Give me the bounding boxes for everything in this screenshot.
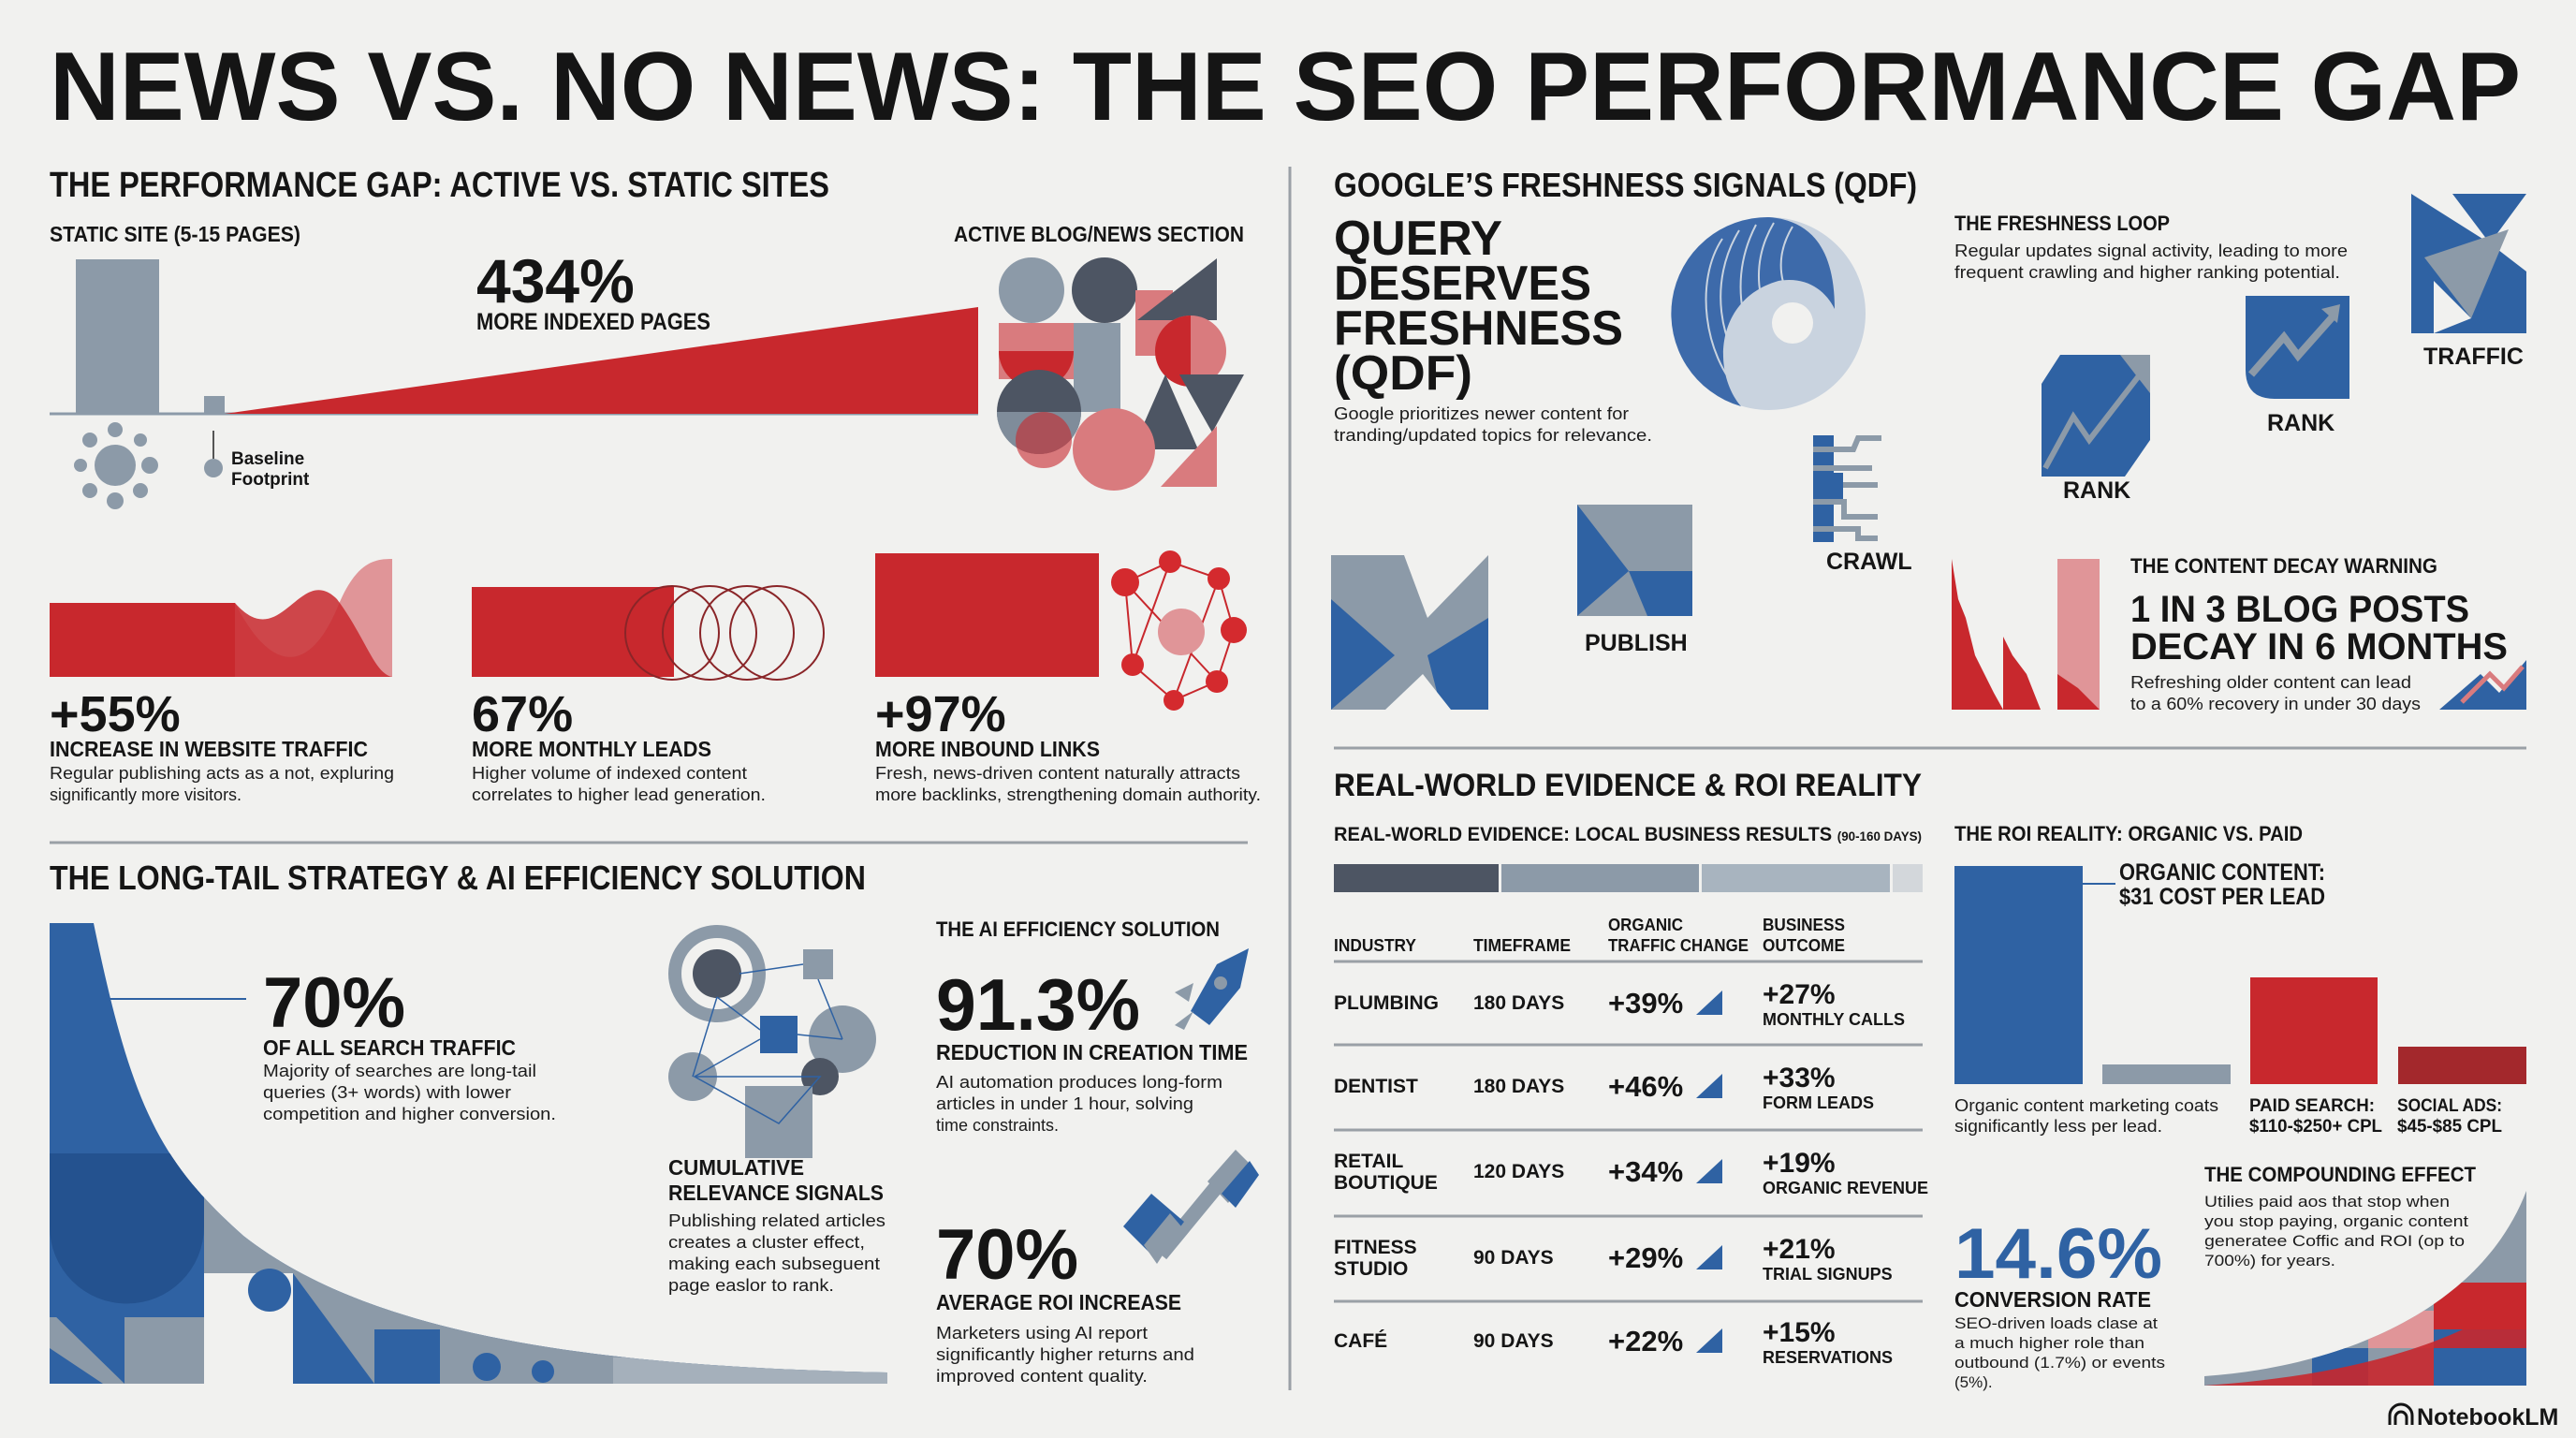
icon: relevance network (668, 932, 876, 1158)
stat: 70% ROI (936, 1215, 1194, 1386)
stat: +55% traffic: INCREASE IN WEBSITE TRAFFIC (50, 737, 368, 761)
panel: ROI reality: $45-$85 CPL (2397, 1117, 2502, 1137)
text: QDF: DESERVES (1334, 257, 1591, 311)
text: compounding effect: generatee Coffic and ROI (op to (2204, 1232, 2465, 1250)
stat: 70% search traffic (263, 963, 556, 1123)
text: freshness loop: Regular updates signal activity, leading to more (1954, 242, 2348, 260)
table: local results: DENTIST (1334, 1076, 1418, 1097)
stat: +97% links: Fresh, news-driven content naturally attracts (875, 764, 1240, 783)
heading: long-tail: THE LONG-TAIL STRATEGY & AI EFFICIENCY SOLUTION (50, 858, 866, 897)
stat: 14.6% conversion: a much higher role than (1954, 1334, 2144, 1352)
table: local results: OUTCOME (1763, 936, 1845, 955)
icon: dumbbell (1123, 1150, 1259, 1264)
chart: compounding curve (2204, 1189, 2527, 1386)
stat: 434%: 434% (476, 246, 635, 315)
stat: 14.6% conversion: CONVERSION RATE (1954, 1287, 2151, 1312)
table: local results (1334, 916, 1928, 1367)
text: content decay: Refreshing older content can lead (2130, 673, 2411, 692)
table: local results: INDUSTRY (1334, 936, 1416, 955)
table: local results: BOUTIQUE (1334, 1172, 1438, 1194)
icon: recovery arrow (2439, 660, 2526, 710)
text: QDF: QUERY (1334, 212, 1502, 266)
table: local results: 180 DAYS (1473, 1076, 1564, 1097)
icon: K shape (1331, 555, 1488, 710)
text: QDF: FRESHNESS (1334, 301, 1623, 356)
panel: ROI reality (1954, 822, 2558, 1431)
icon: rank upper (2246, 296, 2349, 399)
stat: 67% leads: Higher volume of indexed content (472, 764, 747, 783)
text: content decay: DECAY IN 6 MONTHS (2130, 626, 2508, 668)
text: freshness loop: THE FRESHNESS LOOP (1954, 212, 2170, 235)
stat: +55% traffic (50, 559, 394, 804)
stat: 70% ROI: AVERAGE ROI INCREASE (936, 1290, 1181, 1314)
title: NEWS VS. NO NEWS: THE SEO PERFORMANCE GAP (50, 33, 2521, 141)
text: cumulative relevance: RELEVANCE SIGNALS (668, 1181, 884, 1205)
chart: content decay (1952, 559, 2100, 710)
table: local results: +33% (1763, 1063, 1836, 1093)
stat: +55% traffic: +55% (50, 686, 181, 742)
stat: +55% traffic: Regular publishing acts as a not, expluring (50, 764, 394, 783)
table: local results: STUDIO (1334, 1258, 1408, 1280)
text: compounding effect: 700%) for years. (2204, 1252, 2335, 1269)
table: local results: TIMEFRAME (1473, 936, 1571, 955)
stat: +97% links: more backlinks, strengthening domain authority. (875, 785, 1261, 804)
stat: 70% ROI: significantly higher returns and (936, 1345, 1194, 1364)
label: baseline footprint: Footprint (231, 470, 310, 490)
icon: lead circles (472, 586, 824, 680)
stat: 70% search traffic: competition and higher conversion. (263, 1105, 556, 1123)
panel: long-tail strategy (50, 858, 1259, 1391)
text: cumulative relevance: making each subseguent (668, 1255, 880, 1273)
chart: cost per lead (1954, 866, 2526, 1084)
panel: freshness signals (1331, 166, 2526, 713)
label: rank lower: RANK (2063, 477, 2130, 504)
text: compounding effect: you stop paying, organic content (2204, 1212, 2468, 1230)
label: paid search: PAID SEARCH: (2249, 1096, 2375, 1116)
table: local results: RESERVATIONS (1763, 1348, 1893, 1367)
bar: color legend (1334, 864, 1923, 892)
icon: link network (875, 550, 1247, 711)
icon: swirl (1671, 217, 1866, 410)
stat: 67% leads: correlates to higher lead generation. (472, 785, 766, 804)
stat: 14.6% conversion: outbound (1.7%) or events (1954, 1354, 2165, 1372)
text: content decay: to a 60% recovery in under 30 days (2130, 695, 2421, 713)
panel: performance gap (50, 166, 1244, 509)
icon: shape collage (997, 257, 1244, 491)
table: local results: +27% (1763, 979, 1836, 1010)
icon: publish (1577, 505, 1692, 616)
panel: performance gap: MORE INDEXED PAGES (476, 309, 710, 335)
stat: 70% ROI: Marketers using AI report (936, 1324, 1148, 1343)
table: local results: BUSINESS (1763, 916, 1845, 934)
heading: evidence: REAL-WORLD EVIDENCE & ROI REALITY (1334, 768, 1922, 803)
icon: traffic (2411, 194, 2526, 333)
heading: ROI: THE ROI REALITY: ORGANIC VS. PAID (1954, 822, 2303, 845)
text: freshness loop (1954, 212, 2348, 282)
text: compounding effect: Utilies paid aos that stop when (2204, 1193, 2450, 1211)
logo: NotebookLM: NotebookLM (2417, 1404, 2558, 1431)
text: compounding effect (2204, 1163, 2477, 1269)
table: local results: ORGANIC REVENUE (1763, 1179, 1928, 1197)
stat: 91.3%: REDUCTION IN CREATION TIME (936, 1040, 1248, 1064)
icon: rocket (1175, 948, 1249, 1030)
text: QDF: tranding/updated topics for relevance. (1334, 426, 1652, 445)
stat: +97% links (875, 550, 1261, 804)
table: local results: CAFÉ (1334, 1330, 1387, 1352)
icon: rank lower (2042, 355, 2150, 477)
chart: long tail curve (50, 923, 894, 1391)
table: local results: 120 DAYS (1473, 1161, 1564, 1182)
stat: 91.3%: 91.3% (936, 963, 1140, 1046)
table: local results: 90 DAYS (1473, 1247, 1554, 1269)
label: active blog: ACTIVE BLOG/NEWS SECTION (954, 222, 1244, 246)
table: local results: +22% (1608, 1325, 1683, 1357)
table: local results: MONTHLY CALLS (1763, 1010, 1905, 1029)
stat: 70% ROI: improved content quality. (936, 1367, 1148, 1386)
label: social ads: SOCIAL ADS: (2397, 1096, 2502, 1116)
subheading: local business: REAL-WORLD EVIDENCE: LOCAL BUSINESS RESULTS (90-160 DAYS) (1334, 824, 1922, 845)
label: crawl: CRAWL (1826, 549, 1912, 575)
label: baseline footprint: Baseline (231, 449, 304, 469)
table: local results: PLUMBING (1334, 992, 1439, 1014)
table: local results: +46% (1608, 1070, 1683, 1103)
stat: 91.3%: time constraints. (936, 1116, 1059, 1135)
icon: dot cluster (74, 422, 158, 509)
stat: 67% leads: 67% (472, 686, 573, 742)
stat: +55% traffic: significantly more visitors. (50, 785, 242, 804)
table: local results: +15% (1763, 1317, 1836, 1348)
stat: 14.6% conversion: (5%). (1954, 1373, 1993, 1391)
text: QDF (1334, 212, 1652, 445)
stat: 70% search traffic: Majority of searches are long-tail (263, 1062, 536, 1080)
table: local results: 180 DAYS (1473, 992, 1564, 1014)
text: cumulative relevance (668, 1155, 886, 1295)
stat: 14.6% conversion (1954, 1214, 2165, 1391)
table: local results: ORGANIC (1608, 916, 1683, 934)
stat: 70% search traffic: OF ALL SEARCH TRAFFIC (263, 1035, 516, 1060)
stat: 67% leads: MORE MONTHLY LEADS (472, 737, 711, 761)
text: cumulative relevance: Publishing related articles (668, 1211, 886, 1230)
panel: ROI reality: significantly less per lead. (1954, 1117, 2162, 1136)
heading: AI efficiency: THE AI EFFICIENCY SOLUTION (936, 917, 1220, 941)
table: local results: +29% (1608, 1241, 1683, 1274)
stat: 14.6% conversion: 14.6% (1954, 1214, 2162, 1294)
stat: 70% search traffic: 70% (263, 963, 405, 1043)
heading: performance gap: THE PERFORMANCE GAP: ACTIVE VS. STATIC SITES (50, 166, 829, 205)
text: content decay (2130, 554, 2508, 713)
label: organic content: ORGANIC CONTENT: (2119, 859, 2325, 886)
table: local results: FITNESS (1334, 1237, 1417, 1258)
text: QDF: Google prioritizes newer content for (1334, 404, 1629, 423)
stat: 14.6% conversion: SEO-driven loads clase at (1954, 1314, 2158, 1332)
stat: 91.3% (936, 963, 1248, 1135)
table: local results: +39% (1608, 987, 1683, 1020)
text: cumulative relevance: page easlor to rank. (668, 1276, 834, 1295)
label: static site: STATIC SITE (5-15 PAGES) (50, 222, 300, 246)
table: local results: +34% (1608, 1155, 1683, 1188)
table: local results: +21% (1763, 1234, 1836, 1265)
table: local results: FORM LEADS (1763, 1093, 1874, 1112)
table: local results: 90 DAYS (1473, 1330, 1554, 1352)
stat: +97% links: MORE INBOUND LINKS (875, 737, 1100, 761)
icon: crawl (1813, 435, 1881, 542)
stat: 67% leads (472, 586, 824, 804)
text: content decay: 1 IN 3 BLOG POSTS (2130, 589, 2469, 630)
label: rank upper: RANK (2267, 410, 2334, 436)
label: publish: PUBLISH (1585, 630, 1688, 656)
text: compounding effect: THE COMPOUNDING EFFECT (2204, 1163, 2477, 1186)
text: cumulative relevance: creates a cluster effect, (668, 1233, 865, 1252)
stat: 91.3%: articles in under 1 hour, solving (936, 1094, 1193, 1113)
panel: real-world evidence (1334, 768, 1928, 1367)
table: local results: +19% (1763, 1148, 1836, 1179)
label: traffic: TRAFFIC (2423, 344, 2524, 370)
table: local results: TRAFFIC CHANGE (1608, 936, 1749, 955)
stat: +97% links: +97% (875, 686, 1006, 742)
icon: baseline footprint (204, 431, 223, 477)
table: local results: RETAIL (1334, 1151, 1403, 1172)
stat: 91.3%: AI automation produces long-form (936, 1073, 1222, 1092)
text: cumulative relevance: CUMULATIVE (668, 1155, 804, 1180)
text: freshness loop: frequent crawling and higher ranking potential. (1954, 263, 2340, 282)
heading: freshness: GOOGLE’S FRESHNESS SIGNALS (QDF) (1334, 166, 1917, 204)
panel: ROI reality: $31 COST PER LEAD (2119, 884, 2325, 910)
label: organic note: Organic content marketing coats (1954, 1096, 2218, 1115)
icon: traffic wave (50, 559, 392, 677)
text: QDF: (QDF) (1334, 346, 1472, 401)
stat: 70% ROI: 70% (936, 1215, 1078, 1295)
table: local results: TRIAL SIGNUPS (1763, 1265, 1893, 1284)
chart: indexed pages (50, 259, 978, 414)
text: content decay: THE CONTENT DECAY WARNING (2130, 554, 2437, 578)
panel: ROI reality: $110-$250+ CPL (2249, 1117, 2382, 1137)
stat: 70% search traffic: queries (3+ words) with lower (263, 1083, 511, 1102)
